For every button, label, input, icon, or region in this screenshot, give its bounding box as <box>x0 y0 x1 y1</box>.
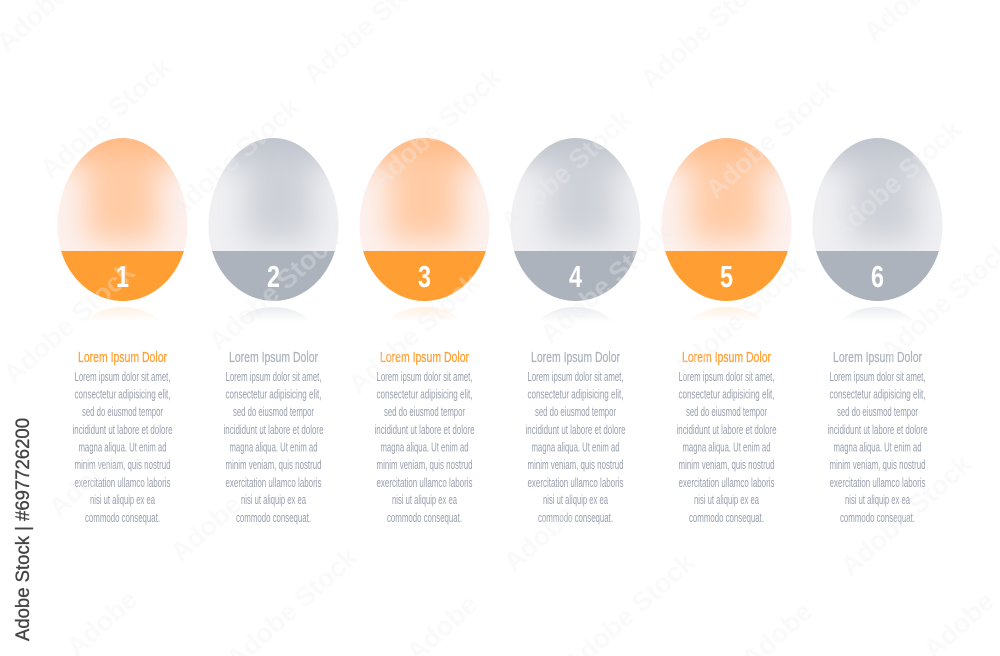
text block 2: Lorem ipsum dolor sit amet, <box>226 370 321 384</box>
text block 3: exercitation ullamco laboris <box>376 476 472 490</box>
egg 2: 2 <box>267 259 280 294</box>
text block 6: commodo consequat. <box>840 511 915 525</box>
watermark pattern: Adobe <box>43 444 125 523</box>
text block 4: commodo consequat. <box>538 511 613 525</box>
text block 5: exercitation ullamco laboris <box>678 476 774 490</box>
text block 1: sed do eiusmod tempor <box>82 405 163 419</box>
text block 2 <box>224 349 324 525</box>
text block 1: Lorem ipsum dolor sit amet, <box>75 370 170 384</box>
text block 2: magna aliqua. Ut enim ad <box>230 440 318 454</box>
watermark pattern: Adobe Stock <box>495 103 638 237</box>
text block 6: Lorem ipsum dolor sit amet, <box>830 370 925 384</box>
text block 2: sed do eiusmod tempor <box>233 405 314 419</box>
text block 4: consectetur adipisicing elit, <box>528 388 624 402</box>
text block 3: incididunt ut labore et dolore <box>374 423 475 437</box>
text block 4: Lorem ipsum dolor sit amet, <box>528 370 623 384</box>
text block 5: Lorem Ipsum Dolor <box>682 349 771 366</box>
text block 2: incididunt ut labore et dolore <box>223 423 324 437</box>
text block 5: Lorem ipsum dolor sit amet, <box>679 370 774 384</box>
egg 5 <box>662 138 792 318</box>
text block 6: nisi ut aliquip ex ea <box>845 493 910 507</box>
egg 6 <box>812 138 942 316</box>
text block 1: exercitation ullamco laboris <box>74 476 170 490</box>
text block 6: exercitation ullamco laboris <box>830 476 926 490</box>
text block 3: Lorem Ipsum Dolor <box>380 349 469 366</box>
watermark pattern: Adobe Stock <box>825 113 968 247</box>
text block 3: nisi ut aliquip ex ea <box>392 493 457 507</box>
watermark pattern: Adobe Stock <box>700 71 843 205</box>
egg 1: 1 <box>116 259 129 294</box>
text block 5: minim veniam, quis nostrud <box>678 458 775 472</box>
text block 5: incididunt ut labore et dolore <box>676 423 777 437</box>
text block 1: consectetur adipisicing elit, <box>74 388 170 402</box>
text block 3: consectetur adipisicing elit, <box>376 388 472 402</box>
egg 3: 3 <box>418 259 431 294</box>
text block 3: commodo consequat. <box>387 511 462 525</box>
egg 1 <box>58 138 188 318</box>
text block 6: consectetur adipisicing elit, <box>830 388 926 402</box>
watermark pattern: Adobe Stock <box>0 256 141 390</box>
text block 4: nisi ut aliquip ex ea <box>543 493 608 507</box>
egg 3 <box>360 138 490 318</box>
text block 1 <box>72 349 173 525</box>
watermark pattern: Adobe Stock <box>343 266 486 400</box>
text block 5: magna aliqua. Ut enim ad <box>682 440 771 454</box>
text block 6: sed do eiusmod tempor <box>837 405 918 419</box>
egg 6: 6 <box>871 259 884 294</box>
text block 2: consectetur adipisicing elit, <box>226 388 322 402</box>
text block 4: Lorem Ipsum Dolor <box>531 349 620 366</box>
watermark pattern: Adobe Stock <box>365 61 508 195</box>
text block 2: nisi ut aliquip ex ea <box>241 493 306 507</box>
watermark pattern: Adobe <box>165 489 247 568</box>
text block 5: commodo consequat. <box>689 511 764 525</box>
watermark pattern: Adobe Stock <box>835 448 978 582</box>
text block 1: commodo consequat. <box>85 511 160 525</box>
egg 4 <box>510 138 640 316</box>
text block 5: sed do eiusmod tempor <box>686 405 767 419</box>
text block 6 <box>828 349 928 525</box>
text block 3: sed do eiusmod tempor <box>384 405 465 419</box>
text block 5: nisi ut aliquip ex ea <box>694 493 759 507</box>
text block 6: magna aliqua. Ut enim ad <box>834 440 922 454</box>
text block 3: Lorem ipsum dolor sit amet, <box>377 370 472 384</box>
text block 4: sed do eiusmod tempor <box>535 405 616 419</box>
text block 1: nisi ut aliquip ex ea <box>90 493 155 507</box>
watermark pattern: Adobe Stock <box>668 251 811 385</box>
watermark pattern: Adobe Stock <box>203 223 346 357</box>
text block 3 <box>374 349 475 525</box>
text block 2: minim veniam, quis nostrud <box>226 458 322 472</box>
text block 2: Lorem Ipsum Dolor <box>229 349 318 366</box>
text block 1: magna aliqua. Ut enim ad <box>78 440 167 454</box>
watermark pattern: Adobe Stock <box>35 51 178 185</box>
watermark pattern: Adobe <box>498 499 580 578</box>
text block 4: exercitation ullamco laboris <box>528 476 624 490</box>
text block 4: magna aliqua. Ut enim ad <box>532 440 620 454</box>
text block 6: incididunt ut labore et dolore <box>827 423 928 437</box>
text block 6: Lorem Ipsum Dolor <box>833 349 922 366</box>
egg 4: 4 <box>569 259 583 294</box>
text block 1: minim veniam, quis nostrud <box>74 458 171 472</box>
text block 4: incididunt ut labore et dolore <box>525 423 626 437</box>
text block 3: minim veniam, quis nostrud <box>376 458 473 472</box>
text block 2: exercitation ullamco laboris <box>226 476 322 490</box>
text block 1: incididunt ut labore et dolore <box>72 423 173 437</box>
watermark pattern: Adobe Stock <box>535 216 678 350</box>
text block 6: minim veniam, quis nostrud <box>830 458 926 472</box>
text block 4 <box>526 349 626 525</box>
egg 2 <box>208 138 338 316</box>
stock id label: Adobe Stock | #697726200 <box>12 418 34 641</box>
text block 1: Lorem Ipsum Dolor <box>78 349 167 366</box>
text block 2: commodo consequat. <box>236 511 311 525</box>
watermark pattern: Adobe Stock <box>163 91 306 225</box>
egg 5: 5 <box>720 259 733 294</box>
text block 5 <box>676 349 777 525</box>
text block 4: minim veniam, quis nostrud <box>528 458 624 472</box>
text block 3: magna aliqua. Ut enim ad <box>380 440 469 454</box>
text block 5: consectetur adipisicing elit, <box>678 388 774 402</box>
